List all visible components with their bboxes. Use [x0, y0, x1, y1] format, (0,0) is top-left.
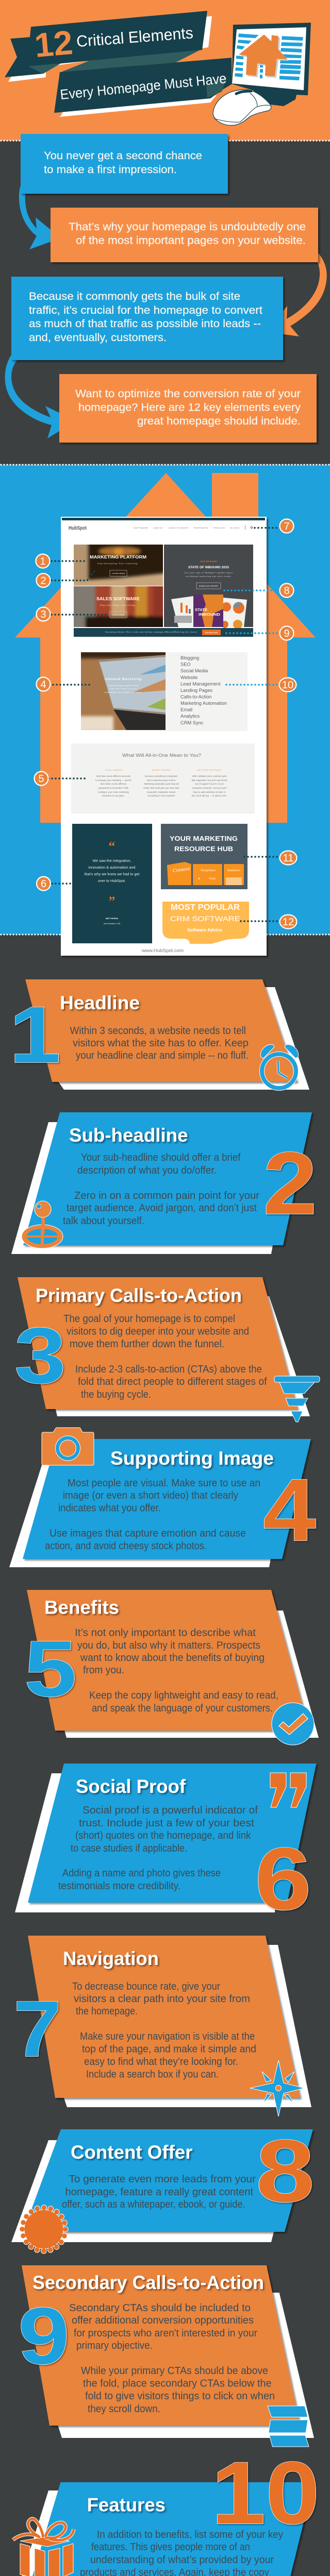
body: offer additional conversion opportunities [72, 2315, 254, 2326]
panel: navigation [13, 1936, 311, 2116]
popular software badge: CRM SOFTWARE [170, 914, 240, 923]
heading: Navigation [63, 1948, 159, 1969]
hero image: marketing platform: MARKETING PLATFORM [90, 554, 146, 560]
body: to case studies if applicable. [71, 1843, 187, 1854]
resource hub panel: Statistics [227, 869, 240, 872]
callout numbers: 2 [40, 575, 46, 586]
benefits panel: email. SEO tools give you more than [143, 787, 179, 789]
callout numbers: 8 [284, 585, 290, 597]
body: image (or even a short video) that clearly [63, 1490, 238, 1501]
panel: benefits [24, 1590, 319, 1745]
body: fold that direct people to different stages of [78, 1376, 267, 1387]
features list: SEO [180, 662, 191, 667]
body: visitors to dig deeper into your website and [67, 1326, 249, 1337]
benefits panel: each component goes further. [147, 779, 176, 782]
features list: CRM Sync [180, 720, 204, 725]
body: top of the page, and make it simple and [82, 2043, 256, 2055]
panel: features [11, 2444, 320, 2576]
testimonial panel: We saw the integration, [93, 858, 131, 863]
body: features. This gives people more of an [91, 2541, 250, 2553]
hero image: marketing platform: LEARN MORE [112, 572, 125, 574]
number 8: 8 [256, 2122, 315, 2221]
callout numbers: 7 [284, 521, 290, 532]
site navigation: BLOGS [230, 527, 239, 529]
benefits panel: Marketing automation goes beyond [144, 783, 179, 785]
supporting image: laptop: HubSpot brings together all the [109, 685, 139, 687]
benefits panel: What Will All-in-One Mean to You? [122, 753, 201, 758]
number 3: 3 [14, 1311, 66, 1400]
benefits panel: everything is more powerful. [147, 794, 175, 797]
body [63, 1152, 259, 1227]
features list: Email [180, 707, 192, 712]
heading: Features [87, 2495, 166, 2515]
body: from you. [83, 1665, 124, 1676]
body: the fold, place secondary CTAs below the [83, 2378, 271, 2389]
intro box three: Because it commonly gets the bulk of site [29, 291, 240, 302]
supporting image: laptop: Inbound Marketing [105, 678, 141, 681]
icon: monitor with house [232, 23, 311, 106]
body [63, 1313, 267, 1400]
body: for prospects who aren't interested in your [74, 2328, 257, 2339]
number 9: 9 [18, 2291, 70, 2381]
body: Your sub-headline should offer a brief [81, 1152, 241, 1163]
number 1: 1 [9, 990, 61, 1080]
body: Zero in on a common pain point for your [74, 1190, 259, 1201]
body: To generate even more leads from your [69, 2174, 256, 2185]
intro box two: of the most important pages on your website. [76, 235, 306, 246]
divider dots: section bottom [1, 934, 330, 936]
benefits panel: MORE POWER [152, 769, 171, 771]
testimonial panel: innovation & automation and [88, 865, 136, 870]
popular software badge: MOST POPULAR [171, 903, 240, 912]
body: they scroll down. [88, 2403, 160, 2415]
panel: sub-headline [11, 1112, 317, 1254]
site logo: HubSpot [69, 525, 87, 531]
body [58, 1805, 258, 1892]
body: the homepage. [76, 2006, 138, 2017]
body: the buying cycle. [81, 1389, 151, 1400]
content offer panel: DOWNLOAD REPORT [199, 585, 218, 587]
hero image: marketing platform: Stop interrupting. Start connecting. [97, 562, 138, 565]
banner: second ribbon [54, 50, 232, 117]
benefits panel: With HubSpot every customer gets [192, 775, 226, 777]
icon: joystick [22, 1201, 63, 1248]
callout numbers: 1 [40, 556, 46, 567]
body [45, 1478, 260, 1552]
benefits panel: LESS HASSLE [105, 769, 123, 771]
testimonial panel: Vice President, YOH [104, 923, 121, 925]
body: (short) quotes on the homepage, and link [75, 1830, 251, 1841]
features list: Marketing Automation [180, 701, 227, 706]
body: Keep the copy lightweight and easy to read, [89, 1690, 278, 1701]
benefits panel: that matter, seven different [101, 783, 127, 785]
panel: supporting image [9, 1428, 316, 1567]
intro box three: as much of that traffic as possible into leads -- [29, 318, 261, 330]
testimonial panel: MATT RIVERA [106, 918, 119, 920]
hero image: sales software: SALES SOFTWARE [96, 596, 140, 601]
panel: blue homepage section [0, 465, 330, 935]
content offer panel: STATE [195, 607, 207, 612]
intro box two [51, 208, 318, 262]
intro box four: Want to optimize the conversion rate of your [75, 388, 301, 400]
arrow: blue two [5, 355, 76, 438]
body [69, 2302, 275, 2415]
intro box four: great homepage should include. [137, 415, 301, 427]
content offer panel: INBOUND [199, 612, 221, 617]
panel: primary calls-to-action [14, 1277, 320, 1422]
testimonial panel: “ [108, 839, 116, 854]
heading: Content Offer [71, 2142, 193, 2163]
popular software badge [162, 902, 249, 944]
heading: Benefits [44, 1597, 119, 1618]
hero image: sales software: Stop cold calling. Start closing. [100, 604, 136, 606]
benefits panel: Why have seven different accounts [96, 775, 130, 777]
intro box three: traffic, it’s crucial for the homepage to convert [29, 304, 262, 316]
content offer panel: on inbound marketing and sales trends. [186, 575, 232, 578]
panel: secondary calls-to-action [18, 2265, 314, 2447]
callout numbers: 10 [282, 680, 293, 691]
body: action, and avoid cheesy stock photos. [45, 1540, 207, 1552]
body: testimonials more credibility. [58, 1880, 180, 1892]
site navigation: ABOUT [154, 527, 163, 529]
divider dots: section top [1, 464, 330, 466]
heading: Primary Calls-to-Action [36, 1285, 242, 1306]
icon: alarm clock [260, 1044, 299, 1088]
benefits panel [71, 743, 255, 814]
body: description of what you do/offer. [77, 1165, 217, 1176]
resource hub panel [161, 824, 248, 889]
benefits panel: BETTER SUPPORT [197, 769, 222, 771]
callout numbers: 12 [283, 917, 294, 928]
body: In addition to benefits, list some of your key [97, 2529, 283, 2540]
body: Secondary CTAs should be included to [69, 2302, 251, 2314]
body: Make sure your navigation is visible at the [80, 2031, 255, 2042]
features list: Lead Management [180, 681, 221, 686]
body: Within 3 seconds, a website needs to tell [70, 1025, 246, 1037]
number 5: 5 [24, 1624, 77, 1713]
icon: mouse [213, 90, 271, 125]
secondary offer strip [74, 628, 253, 637]
body: Include a search box if you can. [86, 2069, 219, 2080]
resource hub panel: Content [172, 866, 190, 874]
heading: Headline [60, 992, 140, 1013]
body [72, 1981, 256, 2080]
supporting image: laptop [81, 652, 166, 730]
number 10: 10 [211, 2444, 320, 2543]
body: understanding of what’s provided by your [90, 2554, 274, 2566]
body [62, 2174, 256, 2210]
heading: Secondary Calls-to-Action [32, 2272, 264, 2293]
icon: stacked pages [268, 2406, 309, 2447]
features list: Blogging [180, 655, 199, 660]
benefits panel: HubSpot, your entire marketing [98, 791, 129, 793]
site navigation [134, 526, 253, 530]
body: Adding a name and photo gives these [62, 1868, 221, 1879]
body: To decrease bounce rate, give your [72, 1981, 220, 1992]
hero image: sales software: LEARN MORE [112, 614, 125, 616]
features list: Website [180, 675, 197, 680]
resource hub panel: Templates [200, 869, 216, 872]
body: Include 2-3 calls-to-action (CTAs) above the [75, 1364, 262, 1375]
callout numbers: 9 [284, 628, 290, 639]
hero image: marketing platform [74, 545, 163, 586]
body: you do, but also why it matters. Prospects [77, 1640, 260, 1651]
content offer panel: Get your copy of HubSpot’s global report [185, 571, 233, 574]
popular software badge: Software Advice [187, 927, 222, 933]
divider dots: header [1, 140, 330, 142]
intro box two: That’s why your homepage is undoubtedly one [69, 221, 306, 233]
benefits panel: have to wait endlessly on hold. In [193, 791, 226, 793]
panel: social proof [15, 1764, 317, 1928]
features list: Analytics [180, 714, 200, 719]
callout dots [48, 528, 279, 921]
body: indicates what you offer. [58, 1502, 161, 1514]
benefits panel: enterprise customer. And you won’t [192, 787, 227, 789]
body: visitors what the site has to offer. Keep [73, 1038, 249, 1049]
body: talk about yourself. [63, 1215, 144, 1227]
icon: burst [22, 2208, 65, 2251]
benefits panel: fact, we’ll call you — in about 5 min. [192, 794, 227, 797]
body: want to know about the benefits of buying [80, 1652, 265, 1664]
hero image: sales software [74, 586, 163, 627]
callout numbers: 4 [40, 679, 46, 690]
site navigation: SOFTWARE [134, 527, 148, 529]
benefits panel: passwords to remember? With [98, 787, 129, 789]
panel: headline [9, 979, 309, 1090]
heading: Sub-headline [69, 1125, 188, 1146]
content offer panel: JUST RELEASED [200, 561, 217, 563]
resource hub panel: YOUR MARKETING [170, 835, 238, 842]
body: easy to find what they’re looking for. [84, 2056, 238, 2067]
panel: content offer [11, 2122, 315, 2251]
site navigation: PARTNERS [194, 527, 208, 529]
body: primary objective. [76, 2340, 153, 2351]
title line one: Critical Elements [76, 24, 194, 50]
site navigation: CASE STUDIES [169, 527, 188, 529]
intro box three: and, eventually, customers. [29, 332, 167, 344]
site navigation: PRICING [213, 527, 225, 529]
supporting image: laptop: tools you’ll need to attract, [110, 688, 138, 690]
callout numbers: 3 [40, 609, 46, 620]
benefits panel: fully supported. You won’t get boxed [192, 779, 227, 782]
body: The goal of your homepage is to compel [63, 1313, 235, 1325]
benefits panel: keywords. Integration means [147, 791, 175, 793]
benefits panel: Because everything is integrated, [145, 775, 178, 777]
body: homepage, feature a really great content [65, 2187, 253, 2198]
icon: gift box [13, 2519, 74, 2576]
resource hub panel: Tools [209, 877, 216, 880]
resource hub panel: & [198, 877, 201, 880]
homepage screenshot [61, 517, 267, 956]
heading: Social Proof [76, 1776, 186, 1797]
body: your headline clear and simple -- no fluff. [76, 1050, 249, 1061]
resource hub panel: RESOURCE HUB [174, 845, 233, 853]
icon: check mark [272, 1703, 314, 1745]
intro box one: You never get a second chance [44, 150, 202, 162]
icon: funnel [274, 1376, 320, 1422]
number 2: 2 [263, 1134, 317, 1233]
body: fold to give visitors things to click on when [85, 2391, 275, 2402]
callout numbers: 6 [41, 878, 46, 890]
benefits panel: out of support if you’re not an [195, 783, 224, 785]
body: While your primary CTAs should be above [81, 2365, 268, 2377]
body: Most people are visual. Make sure to use an [68, 1478, 260, 1489]
testimonial panel: over to HubSpot. [98, 878, 126, 883]
secondary offer strip: REGISTER NOW [205, 632, 218, 634]
icon: quotation marks [270, 1773, 306, 1807]
body: Use images that capture emotion and cause [50, 1528, 246, 1539]
body: move them further down the funnel. [70, 1338, 224, 1350]
features list: Landing Pages [180, 688, 212, 693]
body [75, 1627, 278, 1714]
number 7: 7 [13, 1985, 61, 2073]
body: It’s not only important to describe what [75, 1627, 256, 1638]
icon: camera [42, 1428, 94, 1465]
arrow: orange [266, 252, 327, 336]
testimonial panel: ” [108, 894, 116, 909]
callout circles [34, 519, 297, 928]
number 6: 6 [255, 1829, 311, 1928]
title number 12: 12 [33, 23, 74, 64]
testimonial panel [72, 824, 152, 943]
body: target audience. Avoid jargon, and don’t just [67, 1202, 257, 1214]
number 4: 4 [263, 1461, 316, 1560]
intro box four: homepage? Here are 12 key elements every [78, 402, 301, 413]
callout numbers: 11 [283, 853, 293, 864]
arrow: blue one [19, 187, 61, 249]
header band [0, 0, 330, 141]
intro box one [21, 134, 228, 194]
features list [166, 652, 248, 731]
intro box three [11, 277, 283, 360]
intro box one: to make a first impression. [44, 164, 177, 176]
benefits panel: arsenal is in one place. [102, 794, 125, 797]
callout numbers [38, 521, 294, 928]
body [74, 2529, 283, 2576]
features list: Calls-to-Action [180, 694, 211, 700]
heading: Supporting Image [110, 1448, 274, 1469]
body: visitors a clear path into your site from [74, 1993, 250, 2005]
icon: compass [250, 2060, 304, 2116]
site url: www.HubSpot.com [141, 948, 184, 953]
callout numbers: 5 [38, 773, 44, 785]
content offer panel: STATE OF INBOUND 2015 [188, 566, 229, 569]
testimonial panel: that’s why we knew we had to get [85, 872, 139, 876]
features list: Social Media [180, 668, 208, 673]
body: Social proof is a powerful indicator of [82, 1805, 258, 1816]
secondary offer strip: Upcoming webinar: How to take your holiday campaigns #BeyondMarketing this season [105, 631, 196, 633]
house shape [15, 473, 316, 823]
title line two: Every Homepage Must Have [59, 71, 227, 103]
body: offer, such as a whitepaper, ebook, or guide. [62, 2199, 245, 2210]
banner: first ribbon [5, 11, 212, 82]
intro box four [59, 374, 317, 443]
content offer panel [164, 545, 253, 629]
body: trust. Include just a few of your best [79, 1818, 254, 1829]
body: and speak the language of your customers. [92, 1703, 273, 1714]
benefits panel: to manage your marketing — and for [95, 779, 132, 782]
body [70, 1025, 249, 1061]
supporting image: laptop: understand, and delight customers. [105, 691, 142, 693]
